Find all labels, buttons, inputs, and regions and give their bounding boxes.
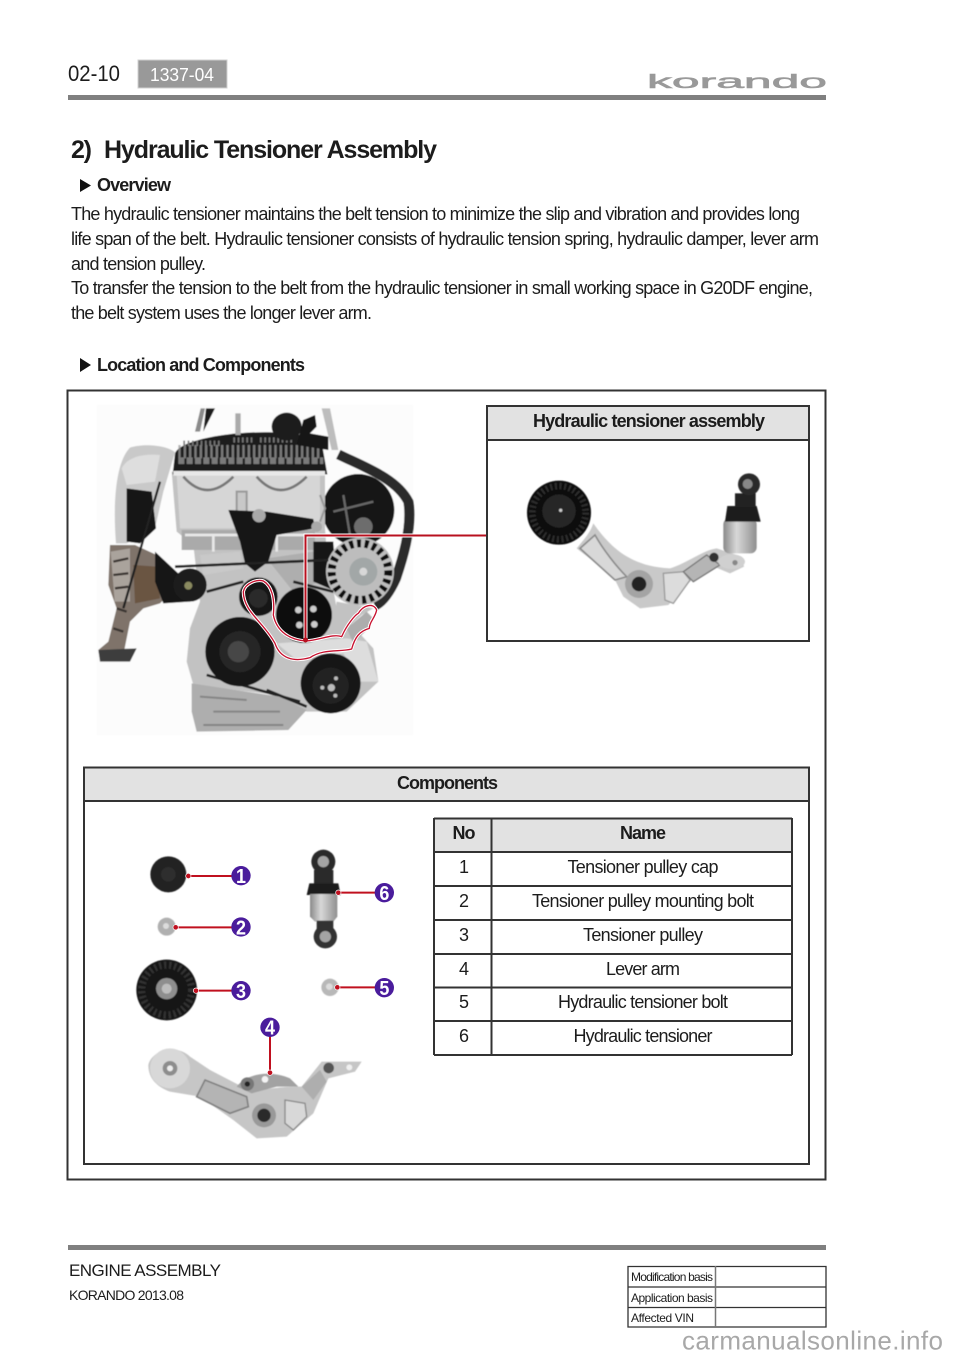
engine bracket <box>228 510 315 572</box>
tensioner pulley <box>239 577 278 616</box>
revision table <box>628 1266 826 1327</box>
tensioner region <box>277 638 378 682</box>
rear accessory <box>322 474 394 546</box>
overview text block <box>71 204 819 323</box>
panel: hydraulic tensioner assembly <box>487 406 809 641</box>
section code badge <box>138 60 227 88</box>
ac pulley <box>301 653 361 713</box>
panel heading <box>487 406 809 440</box>
table row 3 <box>459 925 703 945</box>
callout 4 <box>260 1017 280 1075</box>
alternator <box>326 538 394 606</box>
panel: components <box>84 768 809 1164</box>
exploded parts diagram <box>136 850 394 1138</box>
coolant hose <box>338 454 409 606</box>
page footer <box>68 1245 826 1327</box>
table header row: Name <box>620 823 666 843</box>
title: Hydraulic Tensioner Assembly <box>104 136 437 164</box>
revision table: Modification basis <box>631 1270 713 1284</box>
exhaust manifold <box>98 545 175 658</box>
table row 4 <box>459 959 680 979</box>
components table <box>434 818 792 1055</box>
photo: tensioner assembly <box>527 473 761 608</box>
panel heading: Components <box>397 773 498 793</box>
callout 6: 6 <box>379 882 389 905</box>
outer frame <box>68 390 826 1180</box>
table row 1: 1 <box>459 857 469 877</box>
overview text block: To transfer the tension to the belt from the hydraulic tensioner in small working space in G20DF engine, <box>71 278 813 298</box>
table row 1 <box>459 857 718 877</box>
table header row: No <box>452 823 476 843</box>
table row 4: Lever arm <box>606 959 680 979</box>
table header row <box>452 823 666 843</box>
header rule <box>68 95 826 100</box>
crank pulley <box>205 617 275 686</box>
table row 6 <box>459 1026 712 1046</box>
overview text block: and tension pulley. <box>71 254 206 274</box>
panel heading: Hydraulic tensioner assembly <box>533 411 765 431</box>
dark gap <box>313 542 337 592</box>
table row 6: 6 <box>459 1026 469 1046</box>
section code badge: 1337-04 <box>150 65 214 85</box>
photo: engine <box>97 405 413 735</box>
overview text block: the belt system uses the longer lever arm. <box>71 303 372 323</box>
top fittings <box>272 413 302 441</box>
callout 5 <box>335 977 394 1000</box>
table row 1: Tensioner pulley cap <box>568 857 718 877</box>
callout 5: 5 <box>379 977 389 1000</box>
table row 3: Tensioner pulley <box>583 925 703 945</box>
valve cover <box>173 432 327 474</box>
footer rule <box>68 1245 826 1250</box>
callout 1: 1 <box>236 865 246 888</box>
table row 6: Hydraulic tensioner <box>574 1026 712 1046</box>
leader line: engine to assembly panel <box>303 536 486 642</box>
highlighted outline: tensioner belt area <box>243 581 377 660</box>
heat shield <box>115 445 175 543</box>
callout 4: 4 <box>265 1017 275 1040</box>
overview text block: life span of the belt. Hydraulic tensioner consists of hydraulic tension spring, hydraulic damper, lever arm <box>71 229 819 249</box>
callout 3: 3 <box>236 980 246 1003</box>
revision table: Application basis <box>631 1291 713 1305</box>
callout 2: 2 <box>236 916 246 939</box>
watermark: carmanualsonline.info <box>682 1326 943 1356</box>
model and date: KORANDO 2013.08 <box>69 1287 184 1303</box>
revision table: Affected VIN <box>631 1311 694 1325</box>
table row 4: 4 <box>459 959 469 979</box>
heading: overview: Overview <box>97 175 172 195</box>
logo: korando: korando <box>647 71 827 93</box>
water pump pulley <box>276 587 332 643</box>
table row 2: 2 <box>459 891 469 911</box>
section name: ENGINE ASSEMBLY <box>69 1261 221 1280</box>
page number: 02-10 <box>68 61 120 86</box>
table row 3: 3 <box>459 925 469 945</box>
table row 5: 5 <box>459 992 469 1012</box>
table row 5 <box>459 992 728 1012</box>
heading: location and components: Location and Components <box>97 355 305 375</box>
table row 5: Hydraulic tensioner bolt <box>558 992 728 1012</box>
callout 3 <box>193 980 251 1003</box>
idler pulley <box>173 568 207 602</box>
panel heading <box>84 768 809 801</box>
belt <box>175 560 333 702</box>
parts photos <box>136 850 362 1138</box>
overview text block: The hydraulic tensioner maintains the belt tension to minimize the slip and vibration and provides long <box>71 204 800 224</box>
callout 6 <box>336 882 394 905</box>
callout 2 <box>173 916 251 939</box>
block <box>172 472 378 712</box>
page header <box>68 60 827 100</box>
table row 2: Tensioner pulley mounting bolt <box>532 891 754 911</box>
title: 2) <box>71 136 92 164</box>
oil pan <box>192 683 307 732</box>
callout 1 <box>186 865 251 888</box>
